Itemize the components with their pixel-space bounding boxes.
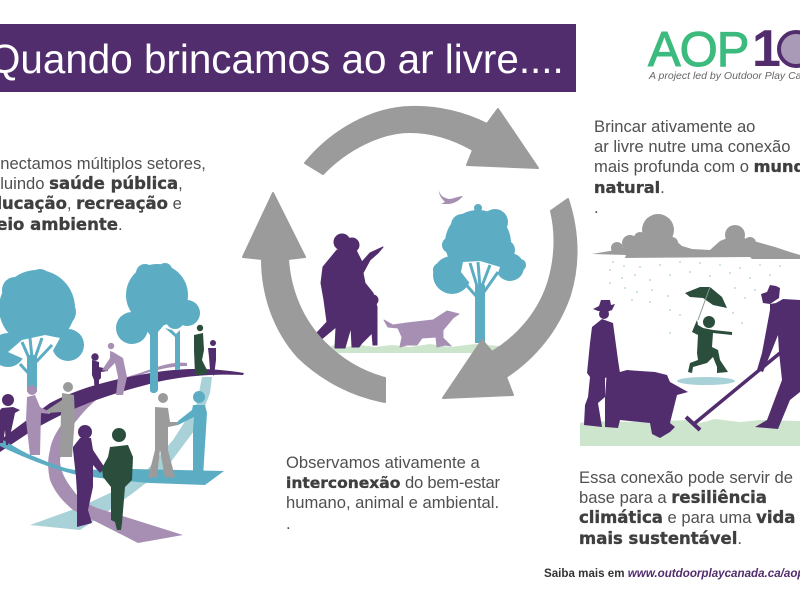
- band: light purple: [48, 363, 187, 543]
- person: purple girl left: [0, 394, 20, 445]
- puddle: [677, 377, 735, 385]
- right scene: [580, 214, 800, 446]
- person: light purple left: [26, 385, 50, 455]
- center scene: bird: [439, 191, 463, 204]
- tree: large left: [0, 269, 84, 392]
- text: interconnection: .: [286, 514, 291, 533]
- text: interconnection: [286, 453, 500, 533]
- logo: AOP10: AOP: [648, 23, 748, 77]
- person: purple girl middle: [91, 353, 108, 397]
- wheelbarrow: [605, 370, 688, 438]
- man with rake: [686, 285, 800, 430]
- person: gray left: [47, 382, 75, 457]
- grass: [580, 419, 800, 446]
- person: dark green adult: [194, 325, 208, 375]
- person: teal right: [178, 391, 207, 477]
- center scene: grass: [329, 344, 500, 353]
- arrow: top: [305, 107, 538, 174]
- clouds: [592, 214, 800, 259]
- woman: [584, 300, 620, 427]
- band: light teal: [30, 377, 212, 530]
- text: connection with nature: natural.: [594, 178, 665, 197]
- text: interconnection: Observamos ativamente a: [286, 453, 480, 472]
- text: sectors: [0, 154, 206, 234]
- arrow: left: [243, 193, 385, 402]
- person: light purple middle: [102, 343, 127, 395]
- center scene: family: [314, 234, 383, 348]
- person: green woman: [102, 428, 133, 530]
- rain: [609, 261, 781, 334]
- title banner: [0, 24, 576, 92]
- arrow: right: [443, 199, 577, 398]
- text: climate resilience: climática e para uma vida: [579, 508, 795, 527]
- text: connection with nature: [594, 117, 800, 217]
- logo: AOP10: 1: [752, 20, 781, 78]
- person: gray right: [148, 393, 180, 478]
- text: climate resilience: mais sustentável.: [579, 529, 742, 548]
- text: connection with nature: ar livre nutre uma conexão: [594, 137, 790, 156]
- center scene: dog: [384, 311, 459, 347]
- band: dark purple: [0, 369, 244, 452]
- text: interconnection: humano, animal e ambiental.: [286, 493, 499, 512]
- text: interconnection: interconexão do bem-estar: [286, 473, 500, 492]
- child with umbrella: [685, 287, 732, 373]
- text: connection with nature: .: [594, 198, 599, 217]
- text: climate resilience: [579, 468, 795, 548]
- band: blue: [0, 438, 224, 485]
- person: purple man: [73, 425, 105, 527]
- cycle arrows: [243, 107, 577, 402]
- person: purple child far: [208, 340, 216, 376]
- logo: AOP10: [647, 20, 800, 82]
- center scene: tree: [433, 204, 526, 343]
- text: climate resilience: base para a resiliência: [579, 488, 767, 507]
- title banner: Quando brincamos ao ar livre....: [0, 36, 564, 82]
- tree: right pair: [116, 263, 200, 393]
- text: climate resilience: Essa conexão pode servir de: [579, 468, 793, 487]
- left scene: [0, 263, 244, 543]
- text: connection with nature: Brincar ativamente ao: [594, 117, 755, 136]
